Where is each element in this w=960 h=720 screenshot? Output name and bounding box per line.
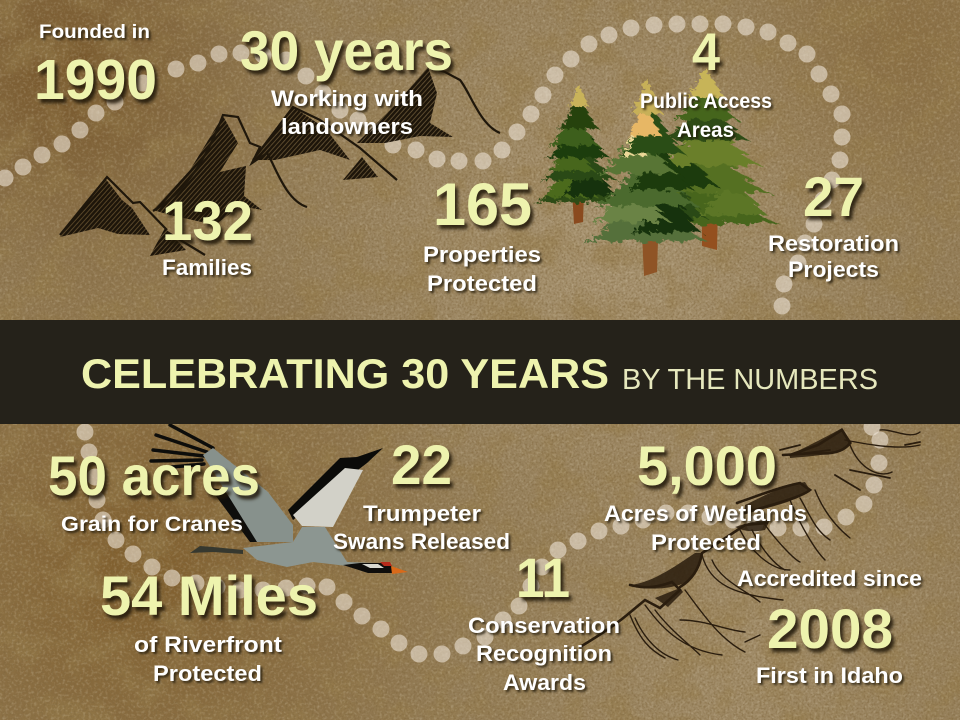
stat: 22 trumpeter swans [333,433,510,554]
stat: 132 families [162,189,253,280]
caption: Restoration [768,231,899,256]
stat: 5,000 acres of wetlands [604,434,807,555]
stat: 165 properties [423,171,541,296]
number: 30 years [240,19,453,82]
front wing [293,468,363,527]
caption: Accredited since [737,566,922,591]
banner subtitle: BY THE NUMBERS [622,364,878,396]
number: 1990 [34,48,157,112]
number: 165 [433,171,532,238]
stat: 22 trumpeter swans: Swans Released [333,529,510,554]
banner [0,320,960,424]
stat: 11 awards [468,546,620,695]
back wing [203,448,293,542]
number: 132 [162,189,253,252]
caption: Working with [271,86,423,111]
number: 5,000 [637,434,777,497]
caption: Public Access [640,90,772,113]
stat: 4 public access areas [640,23,772,142]
caption: Grain for Cranes [61,513,243,536]
stat: 30 years: landowners [281,114,413,139]
stat: 5,000 acres of wetlands: Protected [651,530,761,555]
stat: 4 public access areas: Areas [677,119,734,142]
number: 22 [391,433,452,496]
black wing-tip feathers [151,425,213,468]
number: 11 [516,546,570,609]
illustration: flying crane [151,425,408,574]
caption: Properties [423,242,541,267]
caption: Families [162,255,252,280]
caption: Trumpeter [363,501,481,526]
illustration: pine trees [533,68,784,276]
caption: Acres of Wetlands [604,501,807,526]
icon: middle pine tree [582,78,712,276]
front wing black edge [288,448,383,520]
stat: 11 awards: Recognition [476,641,612,666]
stat: founded 1990 [34,22,157,112]
dotted trail: bottom [76,418,888,662]
banner title: CELEBRATING 30 YEARS [81,350,609,397]
stat: 30 years [240,19,453,139]
stat: 54 miles [100,564,318,686]
stat: 50 acres [48,444,260,536]
illustration: sketched mountains [60,67,500,256]
caption: Conservation [468,613,620,638]
icon: left pine tree [533,84,625,224]
stat: 27 restoration projects [768,165,899,282]
tail [190,546,243,554]
stat: 27 restoration projects: Projects [788,257,879,282]
caption: of Riverfront [134,632,283,657]
icon: right pine tree [628,68,784,250]
back wing black edge [210,488,262,542]
note: First in Idaho [756,663,903,688]
number: 4 [692,23,720,82]
illustration: tree roots [580,428,920,660]
head and beak [343,562,408,574]
stat: accredited 2008 [737,566,922,688]
number: 2008 [767,597,893,660]
stat: 11 awards: Awards [503,670,586,695]
body [243,527,377,567]
number: 27 [803,165,864,228]
number: 50 acres [48,444,260,507]
root masses [630,428,852,607]
number: 54 Miles [100,564,318,627]
dotted trail: top [0,16,850,314]
caption: Founded in [39,22,150,43]
stat: 54 miles: Protected [153,661,262,686]
stat: 165 properties: Protected [427,271,537,296]
